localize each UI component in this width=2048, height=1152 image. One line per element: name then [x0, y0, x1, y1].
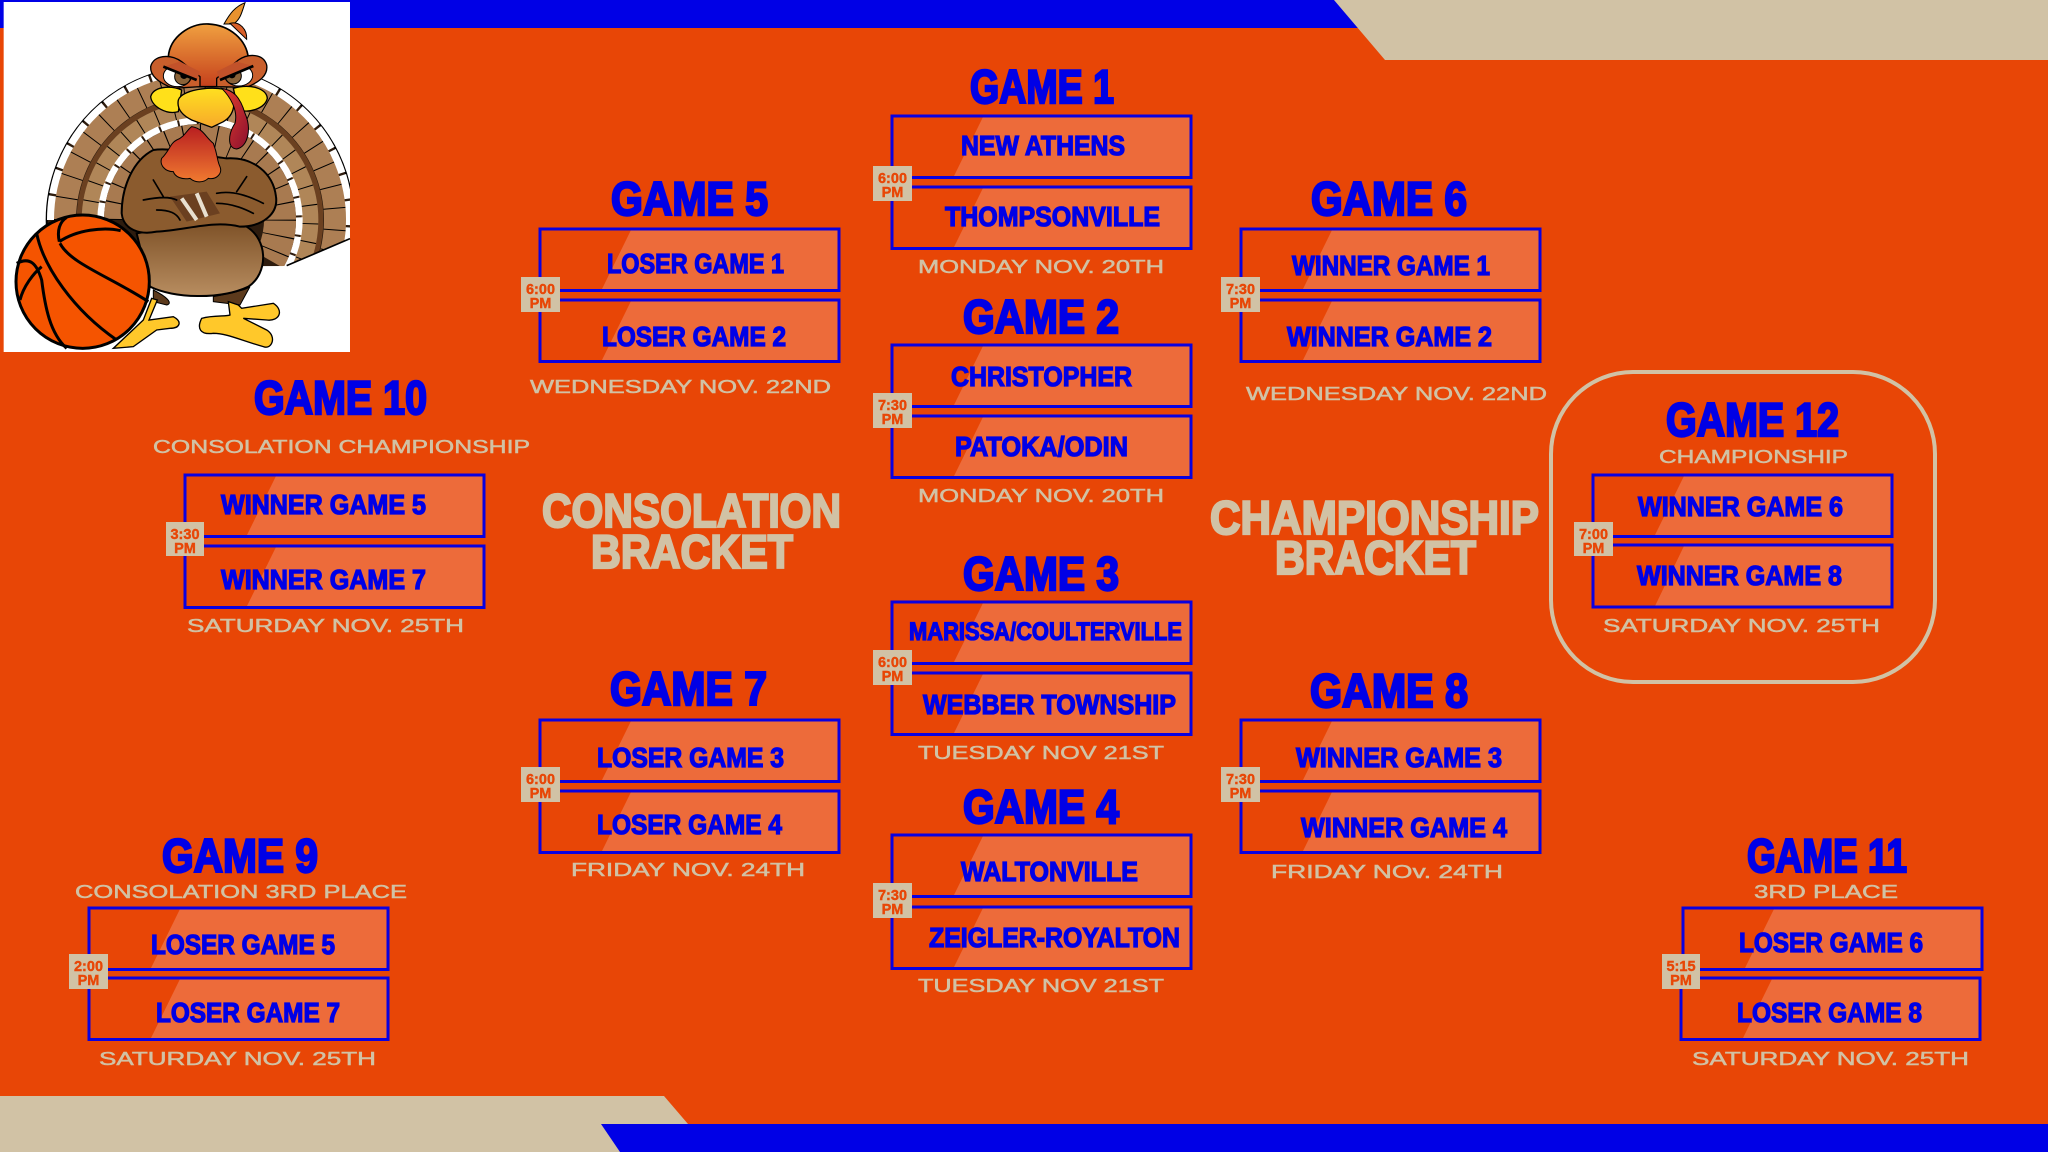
- team slot: LOSER GAME 3: [597, 742, 784, 773]
- time badge: [873, 650, 912, 685]
- panel: game 2: [873, 290, 1191, 506]
- team slot: [1241, 791, 1540, 852]
- team slot: [892, 187, 1191, 248]
- date: FRIDAY NOv. 24TH: [1271, 861, 1503, 882]
- time badge: [1221, 767, 1260, 802]
- time badge: PM: [1583, 541, 1604, 557]
- heading: championship bracket: BRACKET: [1275, 531, 1476, 584]
- panel: game 12 championship: [1551, 372, 1935, 682]
- time badge: 7:30: [1226, 282, 1255, 298]
- heading: consolation bracket: BRACKET: [591, 525, 793, 578]
- team slot: LOSER GAME 6: [1739, 927, 1923, 958]
- team slot: [89, 908, 388, 970]
- team slot: [1593, 475, 1892, 536]
- title: GAME 6: [1311, 172, 1467, 225]
- team slot: [1241, 300, 1540, 362]
- time badge: [1662, 954, 1700, 989]
- team slot: PATOKA/ODIN: [955, 431, 1128, 462]
- team slot: ZEIGLER-ROYALTON: [929, 922, 1180, 953]
- subtitle: CHAMPIONSHIP: [1659, 446, 1848, 467]
- subtitle: CONSOLATION 3RD PLACE: [75, 881, 407, 902]
- time badge: PM: [1670, 973, 1692, 989]
- team slot: [892, 416, 1191, 478]
- time badge: PM: [1230, 296, 1251, 312]
- icon: turkey with basketball: [4, 2, 353, 373]
- team slot: [1681, 978, 1980, 1040]
- date: SATURDAY NOV. 25TH: [1692, 1048, 1969, 1069]
- date: MONDAY NOV. 20TH: [918, 485, 1164, 506]
- top blue band: [0, 0, 1362, 28]
- subtitle: 3RD PLACE: [1754, 881, 1898, 902]
- date: SATURDAY NOV. 25TH: [99, 1048, 376, 1069]
- date: WEDNESDAY NOV. 22ND: [530, 376, 831, 397]
- title: GAME 7: [610, 662, 767, 715]
- time badge: [873, 166, 912, 201]
- time badge: 3:30: [170, 527, 200, 543]
- team slot: WEBBER TOWNSHIP: [923, 689, 1176, 720]
- time badge: PM: [882, 902, 903, 918]
- panel: game 9: [69, 829, 407, 1069]
- time badge: 6:00: [526, 282, 555, 298]
- heading: consolation bracket: CONSOLATION: [542, 484, 841, 537]
- team slot: [540, 300, 839, 362]
- date: SATURDAY NOV. 25TH: [1603, 615, 1880, 636]
- team slot: [540, 229, 839, 290]
- heading: championship bracket: CHAMPIONSHIP: [1210, 491, 1539, 544]
- panel: game 1: [873, 60, 1191, 277]
- team slot: [1593, 545, 1892, 607]
- top beige band: [1334, 0, 2048, 60]
- subtitle: CONSOLATION CHAMPIONSHIP: [153, 436, 530, 457]
- panel: game 10: [153, 371, 530, 636]
- time badge: PM: [174, 541, 196, 557]
- date: TUESDAY NOV 21ST: [918, 742, 1164, 763]
- team slot: LOSER GAME 7: [156, 997, 340, 1028]
- title: GAME 2: [963, 290, 1119, 343]
- date: WEDNESDAY NOV. 22ND: [1246, 383, 1547, 404]
- team slot: [540, 791, 839, 852]
- time badge: PM: [530, 296, 551, 312]
- team slot: [892, 602, 1191, 664]
- title: GAME 11: [1747, 829, 1907, 882]
- time badge: [873, 883, 912, 918]
- time badge: 7:00: [1579, 527, 1608, 543]
- team slot: WINNER GAME 4: [1301, 812, 1507, 843]
- time badge: [166, 522, 204, 557]
- time badge: [1221, 277, 1260, 312]
- team slot: CHRISTOPHER: [951, 361, 1132, 392]
- time badge: PM: [882, 412, 903, 428]
- time badge: [873, 393, 912, 428]
- team slot: [1683, 908, 1982, 970]
- title: GAME 5: [611, 172, 768, 225]
- title: GAME 10: [254, 371, 427, 424]
- team slot: LOSER GAME 2: [602, 321, 786, 352]
- team slot: WINNER GAME 3: [1296, 742, 1502, 773]
- title: GAME 8: [1310, 664, 1468, 717]
- team slot: MARISSA/COULTERVILLE: [909, 618, 1182, 646]
- team slot: WINNER GAME 7: [221, 564, 426, 595]
- team slot: LOSER GAME 8: [1737, 997, 1922, 1028]
- time badge: PM: [882, 669, 903, 685]
- team slot: [892, 345, 1191, 406]
- time badge: 5:15: [1666, 959, 1696, 975]
- time badge: 2:00: [74, 959, 103, 975]
- time badge: 7:30: [878, 888, 907, 904]
- time badge: PM: [1230, 786, 1251, 802]
- time badge: 6:00: [526, 772, 555, 788]
- team slot: [89, 978, 388, 1040]
- time badge: 7:30: [878, 398, 907, 414]
- title: GAME 9: [162, 829, 318, 882]
- team slot: [540, 720, 839, 782]
- team slot: WINNER GAME 6: [1638, 491, 1843, 522]
- time badge: [521, 277, 560, 312]
- time badge: [1574, 522, 1613, 557]
- team slot: WINNER GAME 8: [1637, 560, 1842, 591]
- time badge: PM: [882, 185, 903, 201]
- team slot: [892, 673, 1191, 734]
- team slot: WINNER GAME 5: [221, 489, 426, 520]
- panel: game 7: [521, 662, 839, 880]
- team slot: [892, 116, 1191, 178]
- panel: game 6: [1221, 172, 1547, 404]
- heading: consolation bracket: [542, 484, 841, 578]
- panel: game 3: [873, 547, 1191, 763]
- title: GAME 4: [963, 780, 1119, 833]
- team slot: [892, 907, 1191, 968]
- date: FRIDAY NOV. 24TH: [571, 859, 805, 880]
- panel: game 4: [873, 780, 1191, 996]
- time badge: PM: [530, 786, 551, 802]
- time badge: 6:00: [878, 171, 907, 187]
- panel: game 8: [1221, 664, 1540, 882]
- team slot: THOMPSONVILLE: [945, 201, 1160, 232]
- title: GAME 3: [963, 547, 1119, 600]
- team slot: [1241, 229, 1540, 290]
- title: GAME 1: [970, 60, 1114, 113]
- team slot: [185, 475, 484, 536]
- heading: championship bracket: [1210, 491, 1539, 584]
- team slot: WALTONVILLE: [961, 856, 1138, 887]
- title: GAME 12: [1666, 393, 1839, 446]
- team slot: WINNER GAME 1: [1292, 250, 1490, 281]
- team slot: NEW ATHENS: [961, 130, 1125, 161]
- rounded frame: [1551, 372, 1935, 682]
- date: MONDAY NOV. 20TH: [918, 256, 1164, 277]
- time badge: PM: [78, 973, 99, 989]
- team slot: LOSER GAME 5: [151, 929, 335, 960]
- time badge: 7:30: [1226, 772, 1255, 788]
- team slot: LOSER GAME 1: [607, 248, 784, 279]
- date: SATURDAY NOV. 25TH: [187, 615, 464, 636]
- bottom beige band: [0, 1096, 712, 1152]
- team slot: [892, 835, 1191, 896]
- panel: game 11: [1662, 829, 1982, 1069]
- time badge: [69, 954, 108, 989]
- team slot: LOSER GAME 4: [597, 809, 782, 840]
- team slot: [1241, 720, 1540, 782]
- team slot: [185, 546, 484, 608]
- panel: game 5: [521, 172, 839, 397]
- team slot: WINNER GAME 2: [1287, 321, 1492, 352]
- bottom blue band: [601, 1124, 2048, 1152]
- time badge: [521, 767, 560, 802]
- date: TUESDAY NOV 21ST: [918, 975, 1164, 996]
- time badge: 6:00: [878, 655, 907, 671]
